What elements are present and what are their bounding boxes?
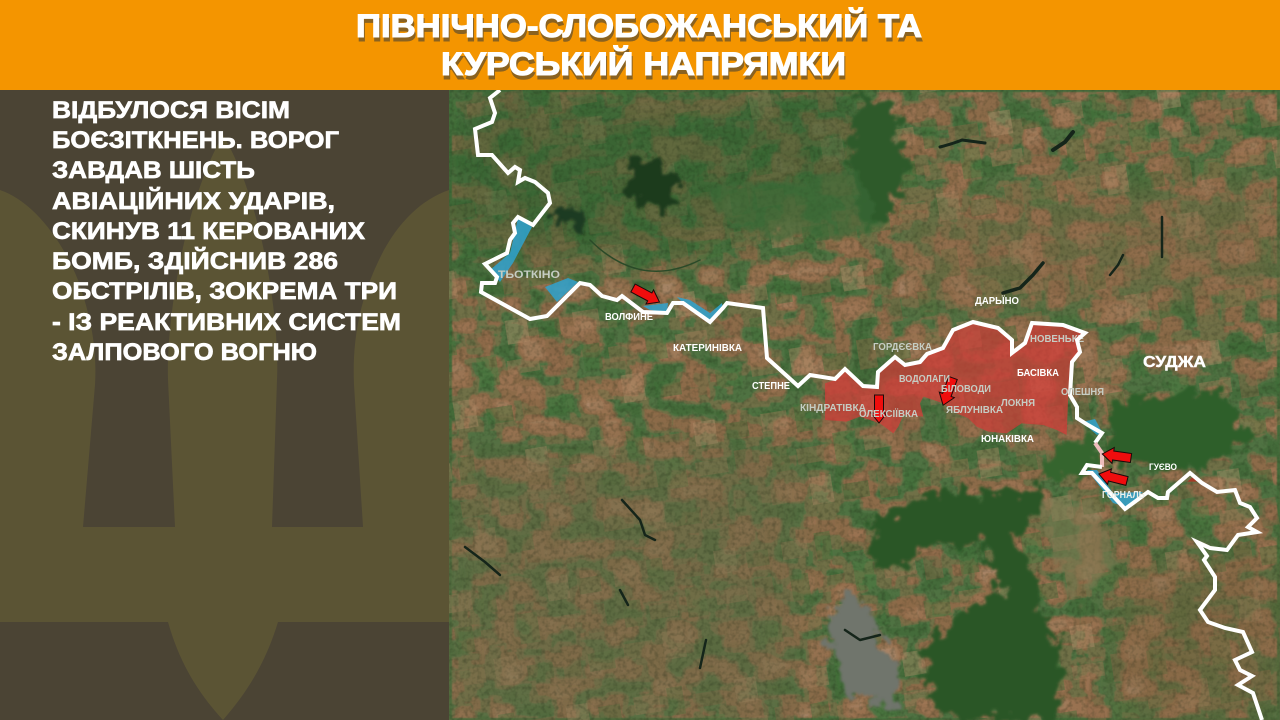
icon: southern forest (870, 485, 1065, 720)
text block: summary: ВІДБУЛОСЯ ВІСІМ (52, 97, 290, 124)
panel: map (449, 90, 1280, 720)
label: Новеньке: НОВЕНЬКЕ (1030, 334, 1084, 345)
map labels: grey villages: ЛОКНЯ (1001, 398, 1035, 409)
map labels: white villages: БАСІВКА (1017, 368, 1059, 379)
map labels: white villages (605, 294, 1206, 501)
map labels: white villages: ЮНАКІВКА (981, 434, 1034, 445)
map labels: white villages: ДАРЬЇНО (975, 294, 1019, 307)
icon: trident emblem (0, 135, 449, 720)
map labels: white villages: ВОЛФИНЕ (605, 312, 653, 323)
panel: left text background (0, 90, 449, 720)
text block: summary: БОМБ, ЗДІЙСНИВ 286 (52, 247, 338, 275)
rivers (465, 132, 1162, 668)
map labels: white villages: ГОРНАЛЬ (1102, 489, 1145, 501)
map labels: grey villages: ОЛЕКСІЇВКА (859, 407, 918, 420)
text block: summary: ОБСТРІЛІВ, ЗОКРЕМА ТРИ (52, 278, 397, 305)
panel: blue zones (490, 218, 1143, 507)
map labels: grey villages: ЯБЛУНІВКА (946, 405, 1003, 416)
text block: summary: ЗАЛПОВОГО ВОГНЮ (52, 339, 317, 366)
state border line (475, 90, 1262, 720)
map labels: grey villages: ГОРДЄЄВКА (873, 342, 932, 353)
map labels: grey villages: ОЛЕШНЯ (1061, 387, 1104, 398)
text block: summary: СКИНУВ 11 КЕРОВАНИХ (52, 218, 365, 245)
map labels: white villages: СТЕПНЕ (752, 381, 790, 392)
text block: summary: БОЄЗІТКНЕНЬ. ВОРОГ (52, 127, 339, 154)
title: КУРСЬКИЙ НАПРЯМКИ (441, 46, 846, 82)
icon: dark forest north (625, 158, 680, 210)
icon: city (826, 596, 900, 705)
arrows: attack directions (629, 281, 1132, 489)
map labels: white villages: КАТЕРИНІВКА (673, 343, 742, 354)
map labels: grey villages: КІНДРАТІВКА (800, 403, 866, 414)
map labels: grey villages: БІЛОВОДИ (941, 384, 991, 395)
map labels: grey villages: ВОДОЛАГИ (899, 374, 950, 385)
title: ПІВНІЧНО-СЛОБОЖАНСЬКИЙ ТА (356, 8, 922, 44)
text block: summary: АВІАЦІЙНИХ УДАРІВ, (52, 187, 335, 215)
map labels: grey villages: ТЬОТКІНО (498, 269, 560, 281)
map labels: grey villages (498, 269, 1104, 420)
text block: summary: ЗАВДАВ ШІСТЬ (52, 157, 255, 184)
panel: controlled red zone (825, 323, 1197, 482)
map labels: white villages: СУДЖА (1143, 354, 1206, 371)
map labels: white villages: ГУЄВО (1149, 462, 1177, 472)
panel: header bar (0, 0, 1280, 90)
text block: summary (52, 97, 401, 366)
title (356, 8, 922, 82)
text block: summary: - ІЗ РЕАКТИВНИХ СИСТЕМ (52, 309, 401, 336)
